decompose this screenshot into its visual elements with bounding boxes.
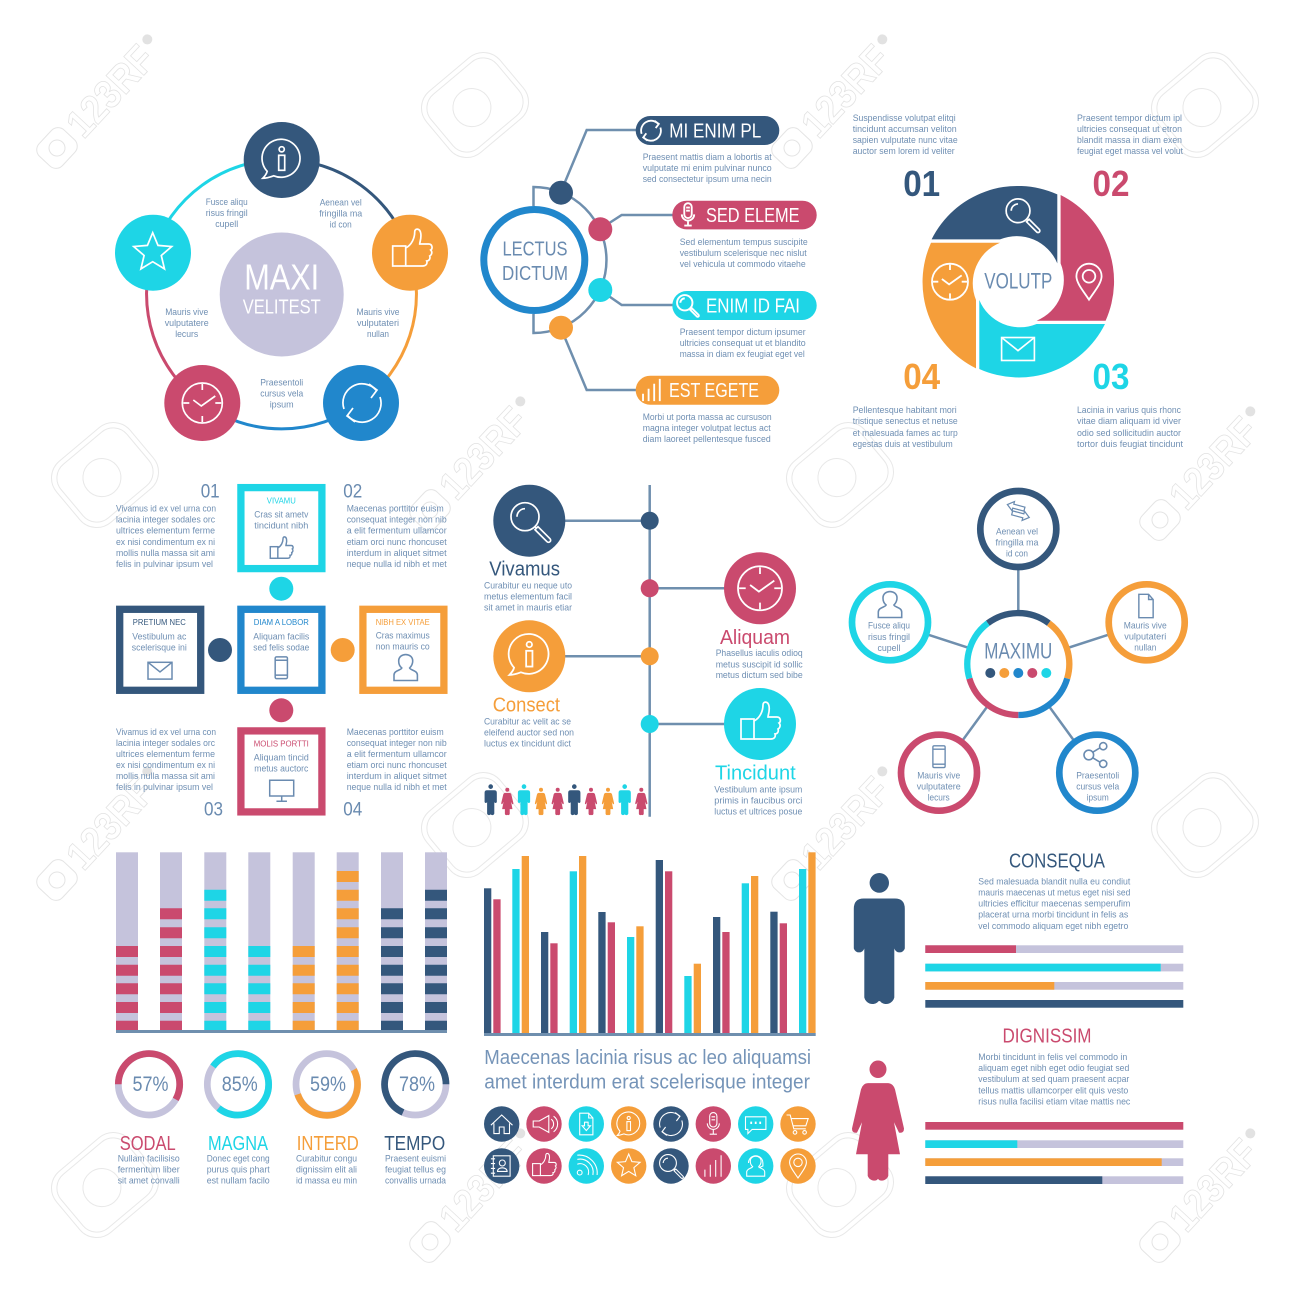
text block 03: mollis nulla massa sit ami [116, 771, 215, 781]
label: MAGNA [207, 1133, 270, 1186]
text block: mauris maecenas ut metus eget nisi sed [978, 888, 1130, 898]
label: INTERD: id massa eu min [296, 1176, 357, 1186]
text block: bottom right: vitae diam aliquam id viver [1077, 416, 1181, 426]
label: bottom [260, 377, 304, 410]
label: right: vulputateri [357, 318, 399, 328]
pill: ENIM ID FAI: ENIM ID FAI [706, 296, 800, 318]
text block 03: felis in pulvinar ipsum vel [116, 782, 213, 792]
satellite: lower left [901, 735, 977, 811]
centre circle: MAXI VELITEST: MAXI [244, 256, 319, 298]
donut: 78%: 78% [399, 1073, 435, 1096]
text block: bottom left [853, 405, 958, 449]
panel: hub with labelled pills [484, 116, 817, 444]
number 04: 04 [343, 800, 363, 821]
node: star [115, 215, 191, 291]
item: Aliquam: metus suscipit id sollic [716, 659, 803, 669]
text block: top left: tincidunt accumsan veliton [853, 124, 957, 134]
item: Vivamus: sit amet in mauris etiar [484, 603, 572, 613]
label: right: nullan [367, 329, 389, 339]
text block: top left [853, 113, 958, 156]
donut: 78% [385, 1054, 446, 1115]
centre: MAXIMU [967, 613, 1069, 715]
label: top left: risus fringil [206, 208, 248, 218]
pill: EST EGETE [636, 376, 779, 405]
label: SODAL: Nullam facilisiso [118, 1154, 180, 1164]
box: NIBH EX VITAE: non mauris co [376, 641, 430, 651]
label: TEMPO: convallis urnada [385, 1176, 447, 1186]
satellite: left: cupell [878, 643, 900, 653]
label: SODAL: sit amet convalli [118, 1176, 180, 1186]
dot: pink [269, 698, 293, 722]
satellite: lower left: vulputatere [917, 781, 961, 791]
progress bars: men [925, 945, 1183, 1008]
label: INTERD: INTERD [297, 1133, 359, 1155]
donut: 85% [207, 1054, 269, 1115]
panel: paired bars and icon grid [484, 852, 816, 1184]
text block 03: Vivamus id ex vel urna con [116, 727, 216, 737]
label: TEMPO: TEMPO [384, 1133, 445, 1155]
label: TEMPO [384, 1133, 447, 1186]
label: right [356, 307, 400, 339]
number 01: 01 [903, 163, 940, 204]
text block: risus nulla facilisi etiam vitae mattis nec [978, 1096, 1131, 1106]
label: left: lecurs [175, 329, 199, 339]
label: INTERD: dignissim elit ali [296, 1165, 357, 1175]
label: MAGNA: Donec eget cong [207, 1154, 270, 1164]
box: MOLIS PORTTI: MOLIS PORTTI [254, 739, 309, 749]
text block 03: lacinia integer sodales orc [116, 738, 215, 748]
node: thumbs up [372, 215, 448, 291]
box: VIVAMU: tincidunt nibh [254, 520, 308, 530]
striped column chart [116, 852, 447, 1033]
item: Vivamus: metus elementum facil [484, 592, 572, 602]
node: info [244, 122, 320, 198]
text block: bottom right [1077, 405, 1183, 449]
text block 02: a elit fermentum ullamcor [347, 526, 447, 536]
caption: Maecenas lacinia risus ac leo aliquamsi [484, 1047, 811, 1069]
box: DIAM A LOBOR: DIAM A LOBOR [254, 617, 309, 627]
box: VIVAMU: Cras sit ametv [254, 509, 309, 519]
satellite: right: nullan [1134, 642, 1156, 652]
text block: placerat urna morbi tincidunt in felis as [978, 910, 1129, 920]
item: Aliquam [716, 552, 803, 680]
timeline lines [529, 485, 760, 817]
item: Consect: Curabitur ac velit ac se [484, 716, 571, 726]
number 03: 03 [1092, 356, 1130, 397]
label: top right: fringilla ma [319, 209, 363, 219]
dot: navy [208, 638, 232, 662]
label: top left: cupell [215, 219, 238, 229]
text block 03 [116, 727, 216, 792]
hub circle: LECTUS DICTUM: DICTUM [502, 263, 568, 285]
text block 3: Praesent tempor dictum ipsumer [680, 327, 806, 337]
text block 1: sed consectetur ipsum urna necin [643, 174, 772, 184]
icon grid [484, 1106, 816, 1184]
hub circle: LECTUS DICTUM [484, 210, 585, 310]
number 04: 04 [903, 356, 940, 397]
dots [549, 181, 612, 340]
label: MAGNA: purus quis phart [207, 1165, 270, 1175]
label: right: Mauris vive [356, 307, 400, 317]
satellite: left: risus fringil [868, 632, 910, 642]
text block 04: neque nulla id nibh et met [347, 782, 447, 792]
panel: hub and satellites [852, 491, 1185, 811]
text block 02: Maecenas porttitor euism [347, 504, 444, 514]
text block 04: interdum in aliquet sitmet [347, 771, 447, 781]
donut: 85%: 85% [222, 1073, 258, 1096]
paired bar chart [484, 852, 816, 1036]
cycle ring [147, 159, 416, 429]
text block 3: massa in diam ex feugiat eget vel [680, 349, 805, 359]
label: TEMPO: Praesent euismi [385, 1154, 446, 1164]
text block 1: Praesent mattis diam a lobortis at [643, 152, 772, 162]
item: Vivamus: Vivamus [489, 559, 560, 581]
panel: five-step cycle [115, 122, 448, 441]
item: Tincidunt: Vestibulum ante ipsum [714, 784, 803, 794]
label: bottom: ipsum [270, 400, 294, 410]
timeline dots [641, 512, 659, 733]
text block 4: magna integer volutpat lectus act [643, 423, 771, 433]
satellite: top: Aenean vel [996, 526, 1038, 536]
text block: top right: Praesent tempor dictum ipl [1077, 113, 1182, 123]
label: INTERD: Curabitur congu [296, 1154, 357, 1164]
connector lines [534, 130, 673, 390]
text block 04: Maecenas porttitor euism [347, 727, 444, 737]
text block: aliquam eget nibh eget odio feugiat sed [978, 1063, 1129, 1073]
satellite: top: id con [1006, 548, 1028, 558]
text block 01: lacinia integer sodales orc [116, 515, 215, 525]
text block 1: vulputate mi enim pulvinar nunco [643, 163, 772, 173]
text block 03: ultrices elementum ferme [116, 749, 215, 759]
text block 02: consequat integer non nib [347, 515, 447, 525]
item: Tincidunt [714, 688, 803, 816]
text block: bottom right: tortor duis feugiat tincidunt [1077, 439, 1183, 449]
donut: 57%: 57% [132, 1073, 168, 1096]
number 01: 01 [201, 482, 220, 503]
centre: MAXIMU: MAXIMU [984, 638, 1052, 663]
label: MAGNA: est nullam facilo [207, 1176, 270, 1186]
box: NIBH EX VITAE [363, 609, 444, 690]
text block 04: a elit fermentum ullamcor [347, 749, 447, 759]
satellite: lower right: ipsum [1087, 792, 1109, 802]
text block 04: consequat integer non nib [347, 738, 447, 748]
item: Consect: eleifend auctor sed non [484, 727, 574, 737]
panel: timeline [484, 485, 803, 817]
dot: cyan [269, 577, 293, 601]
node: clock [164, 365, 240, 441]
pill: MI ENIM PL [636, 116, 779, 145]
number 02: 02 [1092, 163, 1130, 204]
satellite: lower left: Mauris vive [917, 770, 960, 780]
label: top right: Aenean vel [320, 197, 362, 207]
text block 02: neque nulla id nibh et met [347, 559, 447, 569]
label: MAGNA: MAGNA [208, 1133, 269, 1155]
text block 01: mollis nulla massa sit ami [116, 548, 215, 558]
label: top left [206, 197, 248, 229]
box: DIAM A LOBOR: sed felis sodae [253, 642, 309, 652]
box: MOLIS PORTTI: Aliquam tincid [254, 753, 309, 763]
text block: Morbi tincidunt in felis vel commodo in [978, 1052, 1127, 1062]
panel: pinwheel donut [853, 113, 1183, 449]
hub circle: LECTUS DICTUM: LECTUS [502, 239, 568, 261]
text block 01: felis in pulvinar ipsum vel [116, 559, 213, 569]
item: Vivamus [484, 485, 572, 613]
item: Aliquam: metus dictum sed bibe [716, 670, 803, 680]
text block 02 [347, 504, 447, 569]
satellite: lower right: Praesentoli [1076, 770, 1119, 780]
text block: top left: Suspendisse volutpat elitqi [853, 113, 956, 123]
text block: top left: auctor sem lorem id veliter [853, 146, 955, 156]
item: Consect [484, 620, 574, 749]
text block 3: ultricies consequat ut et blandito [680, 338, 806, 348]
label: top right: id con [330, 220, 352, 230]
pill: SED ELEME [672, 201, 817, 229]
text block: bottom left: Pellentesque habitant mori [853, 405, 957, 415]
text block 02: etiam orci nunc rhoncuset [347, 537, 447, 547]
text block 3 [680, 327, 806, 359]
text block: top left: sapien vulputate nunc vitae [853, 135, 958, 145]
icon: pin [1076, 264, 1102, 300]
text block: Sed malesuada blandit nulla eu condiut [978, 876, 1131, 886]
text block 03: ex nisi condimentum ex ni [116, 760, 215, 770]
label: top right [319, 197, 363, 230]
icon: mail [1002, 338, 1034, 360]
box: PRETIUM NEC: PRETIUM NEC [133, 617, 186, 627]
label: bottom: cursus vela [260, 388, 304, 398]
label: left: Mauris vive [165, 307, 208, 317]
satellite: left: Fusce aliqu [868, 621, 910, 631]
text block 4 [643, 412, 772, 444]
text block: ultricies efficitur maecenas semperufim [978, 899, 1131, 909]
text block: bottom right: odio sed sollicitudin auctor [1077, 428, 1181, 438]
item: Consect: Consect [493, 694, 560, 716]
satellite: right [1109, 584, 1185, 660]
number 03: 03 [204, 800, 223, 821]
label: top left: Fusce aliqu [206, 197, 248, 207]
item: Tincidunt: Tincidunt [715, 762, 796, 784]
label: SODAL: SODAL [120, 1133, 176, 1155]
panel: gender statistics [852, 850, 1183, 1184]
text block: top right: feugiat eget massa vel volut [1077, 146, 1183, 156]
box: PRETIUM NEC [120, 609, 201, 690]
label: INTERD [296, 1133, 359, 1186]
item: Aliquam: Aliquam [720, 627, 790, 649]
caption [484, 1047, 811, 1093]
text block 01: Vivamus id ex vel urna con [116, 504, 216, 514]
centre circle: MAXI VELITEST [220, 232, 344, 356]
text block 01: ex nisi condimentum ex ni [116, 537, 215, 547]
dot: orange [331, 638, 355, 662]
text block: bottom left: et malesuada fames ac turp [853, 428, 958, 438]
figure: man [854, 873, 905, 1004]
item: Aliquam: Phasellus iaculis odioq [716, 648, 803, 658]
centre circle: MAXI VELITEST: VELITEST [243, 296, 321, 318]
satellite: lower right: cursus vela [1076, 781, 1120, 791]
text block [978, 1052, 1131, 1106]
text block 04 [347, 727, 447, 792]
text block 2: Sed elementum tempus suscipite [680, 237, 808, 247]
text block 04: etiam orci nunc rhoncuset [347, 760, 447, 770]
text block 2: vel vehicula ut commodo vitaehe [680, 259, 806, 269]
text block: top right: blandit massa in diam exen [1077, 135, 1182, 145]
item: Vivamus: Curabitur eu neque uto [484, 580, 572, 590]
text block: top right [1077, 113, 1183, 156]
pill: SED ELEME: SED ELEME [706, 205, 800, 227]
panel: cross of boxes [116, 482, 447, 821]
satellite: top: fringilla ma [996, 537, 1039, 547]
text block 01 [116, 504, 216, 569]
donut: 59% [296, 1054, 358, 1115]
donut: 57% [118, 1054, 180, 1115]
label: bottom: Praesentoli [260, 377, 303, 387]
text block: bottom right: Lacinia in varius quis rhonc [1077, 405, 1181, 415]
centre label: VOLUTP [984, 268, 1052, 294]
box: PRETIUM NEC: Vestibulum ac [132, 631, 187, 641]
label: left: vulputatere [165, 318, 209, 328]
box: PRETIUM NEC: scelerisque ini [132, 642, 187, 652]
text block: bottom left: egestas duis at vestibulum [853, 439, 953, 449]
label: SODAL [118, 1133, 180, 1186]
box: MOLIS PORTTI [241, 731, 322, 812]
satellite: top [980, 491, 1056, 567]
label: TEMPO: feugiat tellus eg [385, 1165, 446, 1175]
node: refresh [323, 365, 399, 441]
pill: EST EGETE: EST EGETE [669, 380, 759, 402]
label: left [165, 307, 209, 339]
text block: tellus mattis ullamcorper elit quis vesto [978, 1085, 1128, 1095]
box: NIBH EX VITAE: Cras maximus [376, 630, 430, 640]
satellite: lower left: lecurs [928, 792, 950, 802]
satellite: lower right [1059, 735, 1135, 811]
heading: CONSEQUA: CONSEQUA [1009, 850, 1106, 872]
icon: clock [932, 264, 968, 300]
text block 01: ultrices elementum ferme [116, 526, 215, 536]
pill: MI ENIM PL: MI ENIM PL [669, 120, 761, 142]
box: MOLIS PORTTI: metus auctorc [254, 764, 309, 774]
donut: 59%: 59% [310, 1073, 346, 1096]
connectors [890, 560, 1147, 773]
text block: top right: ultricies consequat ut etron [1077, 124, 1182, 134]
text block 4: Morbi ut porta massa ac cursuson [643, 412, 772, 422]
number 02: 02 [343, 482, 362, 503]
heading: DIGNISSIM: DIGNISSIM [1002, 1026, 1092, 1048]
text block: vestibulum at sed quam praesent acpar [978, 1074, 1129, 1084]
box: NIBH EX VITAE: NIBH EX VITAE [376, 617, 430, 627]
satellite: right: Mauris vive [1124, 620, 1167, 630]
box: DIAM A LOBOR: Aliquam facilis [253, 631, 310, 641]
text block: bottom left: tristique senectus et netuse [853, 416, 958, 426]
item: Tincidunt: primis in faucibus orci [714, 795, 802, 805]
figure: woman [852, 1060, 904, 1181]
text block: vel commodo aliquam eget nibh egetro [978, 921, 1128, 931]
icon: search [1006, 199, 1040, 233]
text block [978, 876, 1131, 931]
people row [485, 784, 647, 815]
box: DIAM A LOBOR [241, 609, 322, 690]
item: Tincidunt: luctus et ultrices posue [714, 806, 802, 816]
donut segments [923, 186, 1114, 377]
text block 02: interdum in aliquet sitmet [347, 548, 447, 558]
panel: striped columns and donuts [116, 852, 447, 1186]
caption: amet interdum erat scelerisque integer [484, 1071, 810, 1093]
satellite: left [852, 584, 928, 660]
box: VIVAMU [241, 488, 322, 569]
text block 2: vestibulum scelerisque nec nislut [680, 248, 807, 258]
label: SODAL: fermentum liber [118, 1165, 180, 1175]
progress bars: women [925, 1122, 1183, 1184]
text block 2 [680, 237, 808, 269]
item: Consect: luctus ex tincidunt dict [484, 739, 571, 749]
pill: ENIM ID FAI [672, 291, 817, 320]
box: VIVAMU: VIVAMU [267, 496, 296, 506]
text block 1 [643, 152, 772, 184]
text block 4: diam laoreet pellentesque fusced [643, 434, 771, 444]
satellite: right: vulputateri [1124, 631, 1166, 641]
